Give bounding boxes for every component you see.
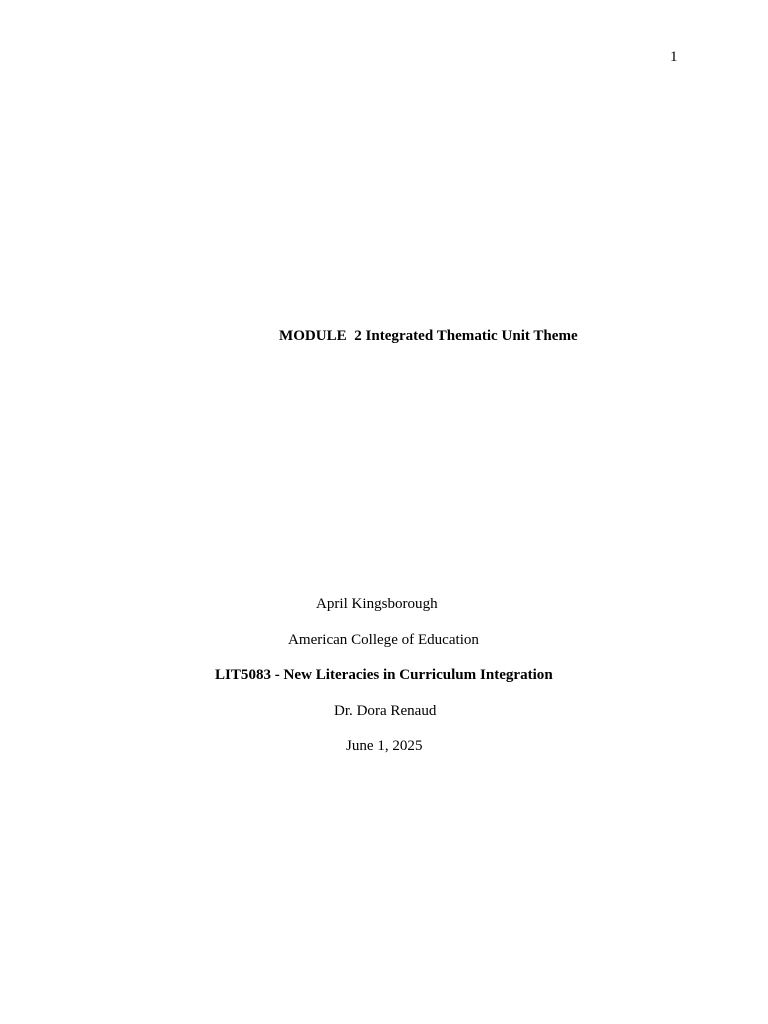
author name: April Kingsborough <box>316 596 438 612</box>
instructor: Dr. Dora Renaud <box>334 703 436 719</box>
institution: American College of Education <box>288 632 479 648</box>
page number: 1 <box>670 49 678 65</box>
title: MODULE 2 Integrated Thematic Unit Theme <box>279 328 578 344</box>
date: June 1, 2025 <box>346 738 422 754</box>
course title: LIT5083 - New Literacies in Curriculum Integration <box>215 667 553 683</box>
